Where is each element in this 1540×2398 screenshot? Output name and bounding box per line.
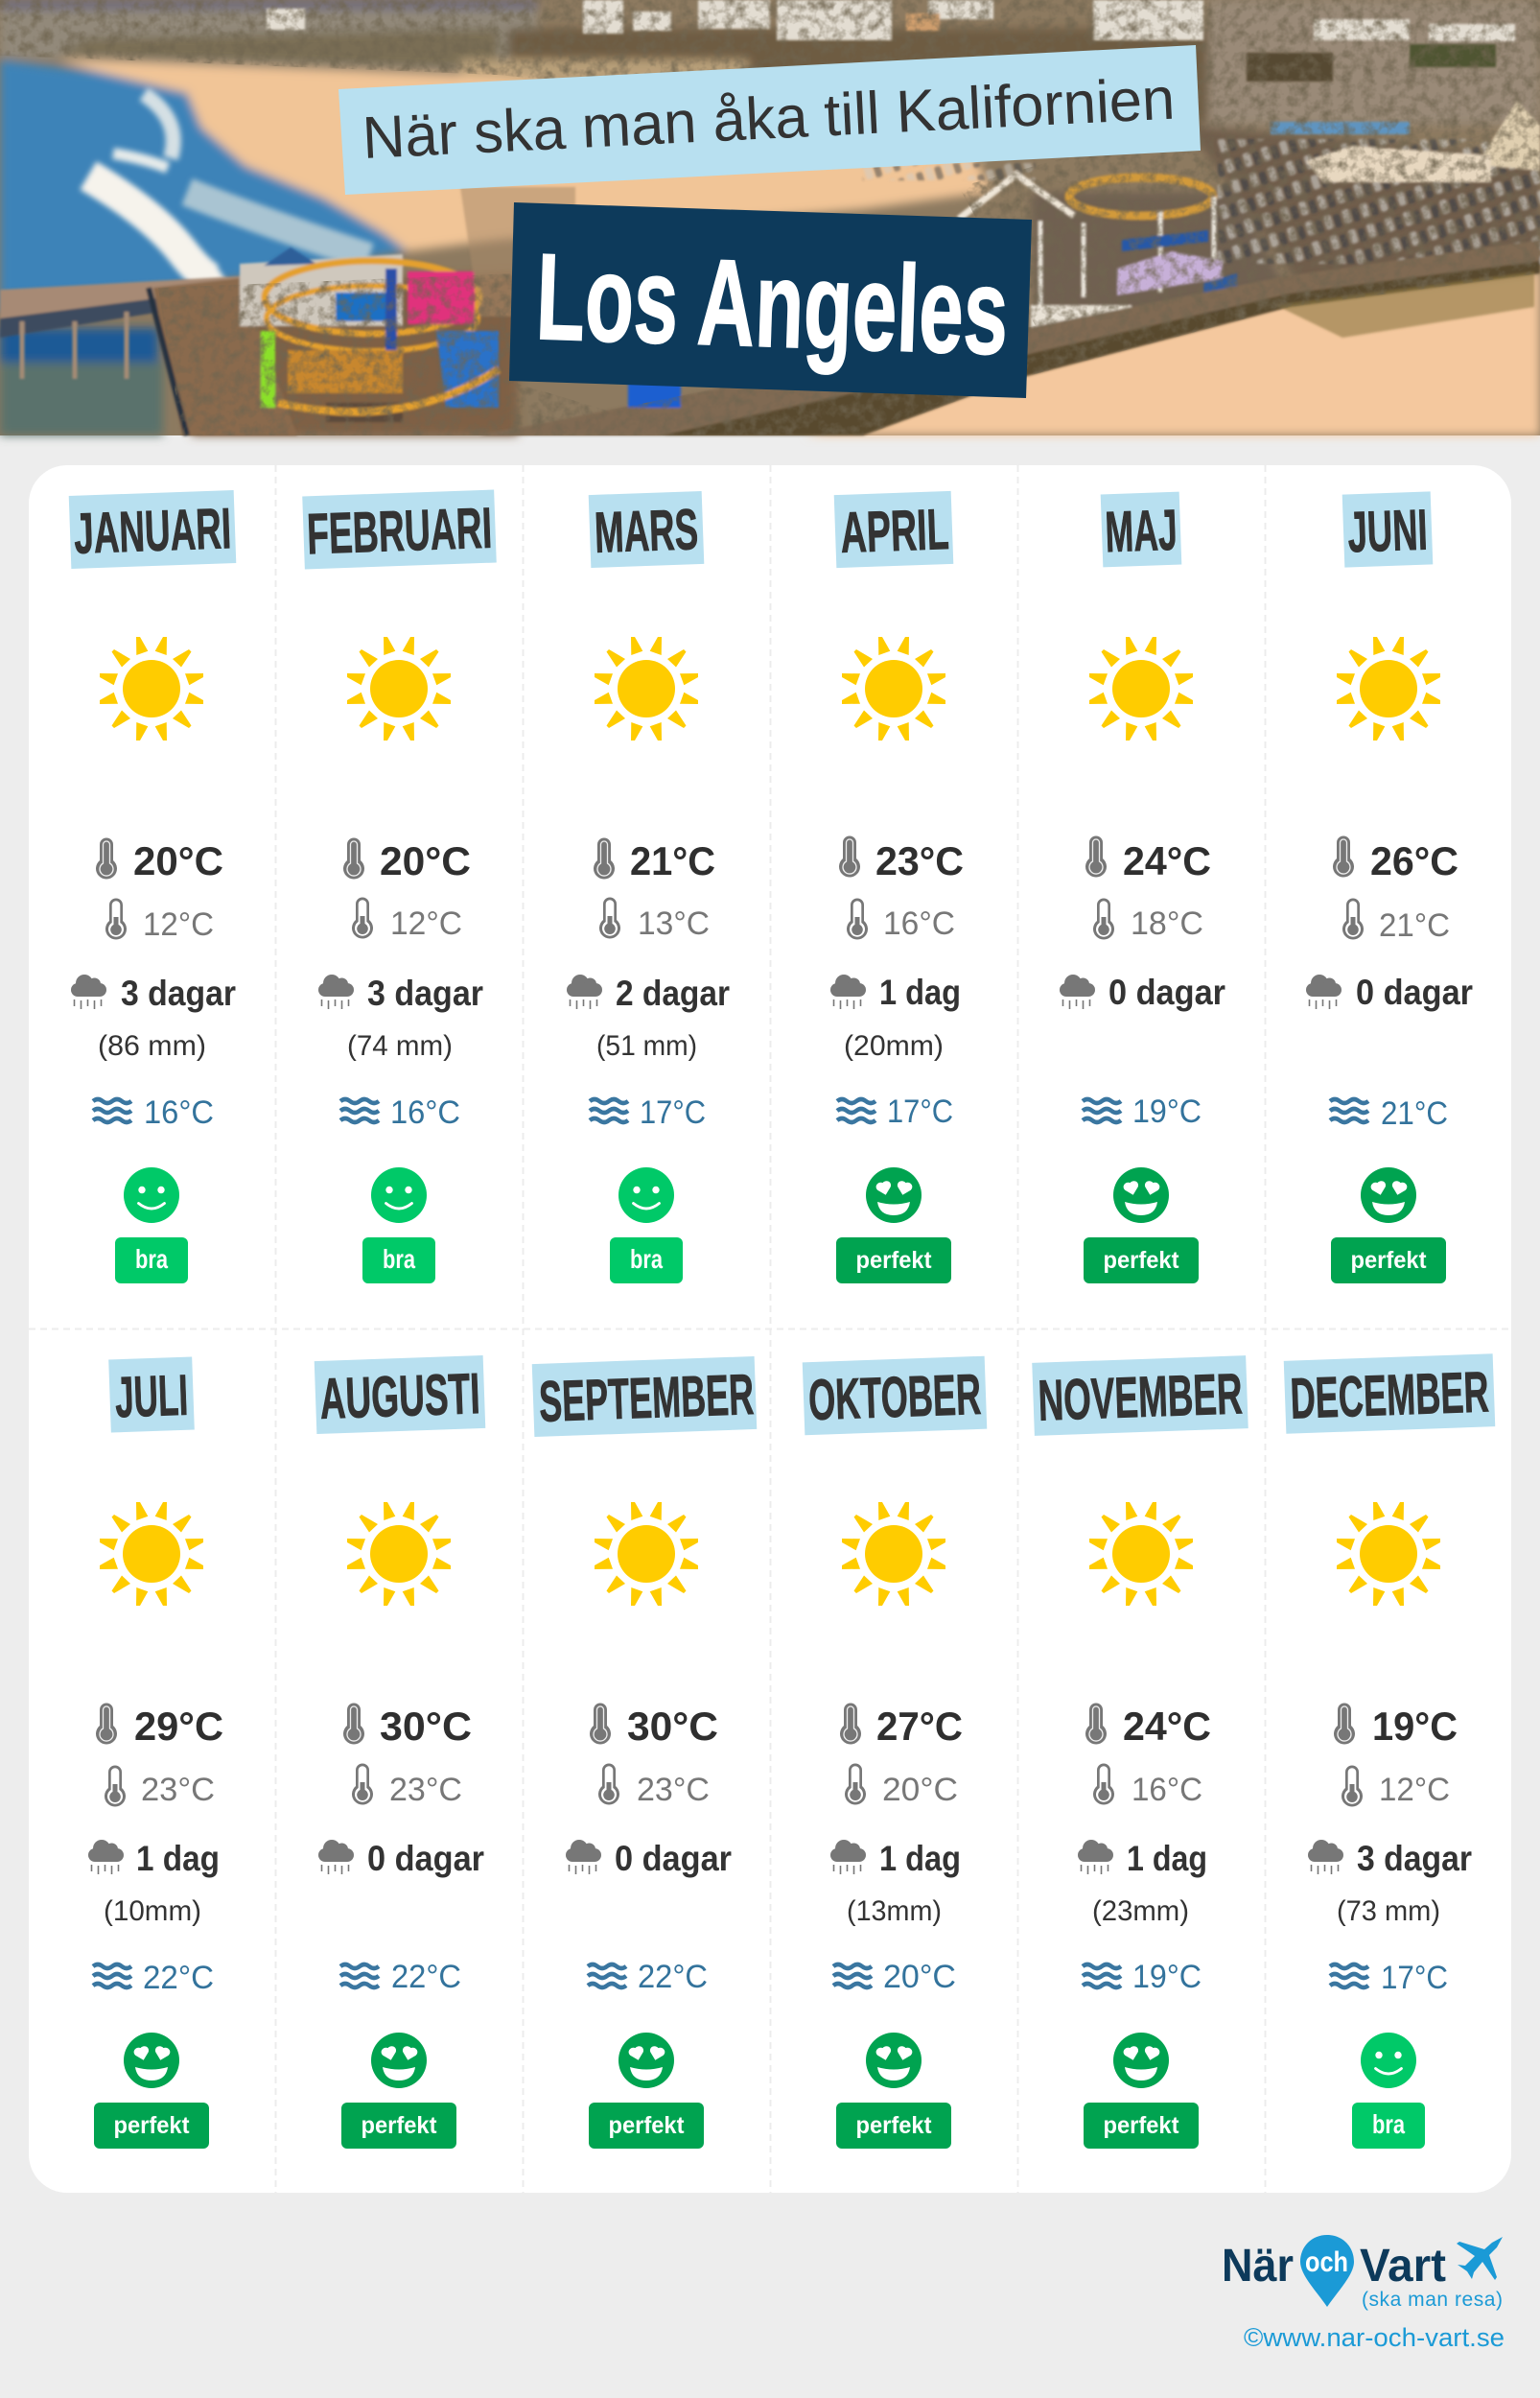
logo word: Vart: Vart xyxy=(1360,2241,1446,2292)
month heading: juli xyxy=(108,1357,195,1432)
icon: thermometer low xyxy=(105,1765,126,1806)
rating badge xyxy=(589,2103,704,2149)
rainfall: (13mm) xyxy=(847,1895,942,1927)
low temperature: 21°C xyxy=(1379,907,1450,944)
icon: water waves xyxy=(1083,1099,1121,1122)
low temperature: 23°C xyxy=(141,1772,215,1808)
low temperature: 12°C xyxy=(390,905,462,942)
rain days: 0 dagar xyxy=(1356,973,1473,1012)
icon: map pin: och xyxy=(1305,2246,1348,2278)
sea temperature: 16°C xyxy=(144,1094,214,1131)
icon: thermometer low xyxy=(599,898,620,938)
title banner xyxy=(509,202,1032,398)
icon: sun xyxy=(1089,637,1193,741)
month: juli xyxy=(88,1357,223,2149)
icon: sun xyxy=(842,1502,945,1606)
month: februari xyxy=(302,490,497,1283)
rating badge xyxy=(115,1237,188,1283)
sea temperature: 19°C xyxy=(1132,1959,1202,1995)
icon: water waves xyxy=(590,1099,628,1122)
icon: water waves xyxy=(1083,1964,1121,1987)
logo word: När: När xyxy=(1222,2241,1294,2292)
icon: thermometer low xyxy=(105,898,127,939)
rain days: 1 dag xyxy=(879,1839,961,1878)
icon: heart-eyes face xyxy=(371,2033,427,2088)
month: mars xyxy=(567,491,730,1283)
pier deck and underside xyxy=(479,240,1540,435)
icon: sun xyxy=(842,637,945,741)
low temperature: 16°C xyxy=(1132,1772,1202,1808)
icon: thermometer high xyxy=(343,1704,364,1744)
icon: water waves xyxy=(833,1964,872,1987)
icon: thermometer high xyxy=(594,838,615,879)
high temperature: 29°C xyxy=(134,1704,223,1749)
icon: rain cloud xyxy=(71,975,106,1009)
sea temperature: 16°C xyxy=(390,1094,460,1131)
sea temperature: 19°C xyxy=(1132,1093,1202,1130)
icon: water waves xyxy=(837,1099,875,1122)
icon: rain cloud xyxy=(830,1840,866,1874)
rating badge: bra xyxy=(630,1244,663,1274)
rainfall: (51 mm) xyxy=(596,1030,697,1062)
rating badge: perfekt xyxy=(1103,1247,1179,1274)
icon: thermometer high xyxy=(96,838,117,879)
icon: thermometer low xyxy=(845,1763,866,1804)
low temperature: 20°C xyxy=(882,1772,958,1808)
icon: smiley xyxy=(1361,2033,1416,2088)
rides on the right xyxy=(959,175,1074,219)
month heading: maj xyxy=(1101,492,1181,567)
month: september xyxy=(532,1356,757,2149)
high temperature: 21°C xyxy=(630,838,715,883)
month heading: augusti: AUGUSTI xyxy=(318,1361,481,1431)
month heading: september: SEPTEMBER xyxy=(538,1362,755,1434)
icon: water waves xyxy=(1330,1964,1368,1987)
rating badge: perfekt xyxy=(361,2112,437,2139)
rating badge: perfekt xyxy=(1350,1247,1427,1274)
month heading: maj: MAJ xyxy=(1104,498,1178,564)
icon: sun xyxy=(100,1502,203,1606)
icon: thermometer low xyxy=(1093,1763,1114,1804)
month: november xyxy=(1032,1355,1248,2149)
month: augusti xyxy=(315,1355,485,2149)
icon: smiley xyxy=(124,1167,179,1223)
month heading: november xyxy=(1032,1355,1248,1436)
rain days: 1 dag xyxy=(879,973,961,1012)
month: oktober xyxy=(803,1356,987,2149)
high temperature: 19°C xyxy=(1372,1704,1458,1749)
rating badge xyxy=(836,2103,951,2149)
icon: water waves xyxy=(340,1099,379,1122)
icon: thermometer low xyxy=(847,898,868,939)
rating badge xyxy=(362,1237,435,1283)
icon: heart-eyes face xyxy=(1361,1167,1416,1223)
rating badge: perfekt xyxy=(1103,2112,1179,2139)
website credit: ©www.nar-och-vart.se xyxy=(1244,2323,1505,2352)
month heading: juli: JULI xyxy=(114,1363,189,1429)
icon: water waves xyxy=(1330,1099,1368,1122)
rating badge xyxy=(341,2103,456,2149)
icon: thermometer high xyxy=(1334,1704,1355,1744)
hero photo: Santa Monica beach and pier xyxy=(0,0,1540,435)
high temperature: 24°C xyxy=(1123,838,1211,883)
icon: thermometer low xyxy=(598,1763,619,1804)
month: maj xyxy=(1060,492,1225,1283)
low temperature: 18°C xyxy=(1131,905,1203,942)
sea temperature: 17°C xyxy=(640,1094,706,1131)
rain days: 3 dagar xyxy=(1357,1839,1472,1878)
month heading: mars xyxy=(589,491,704,568)
rating badge xyxy=(610,1237,683,1283)
icon: thermometer high xyxy=(343,838,364,879)
icon: heart-eyes face xyxy=(866,1167,922,1223)
icon: heart-eyes face xyxy=(1113,2033,1169,2088)
icon: sun xyxy=(595,637,698,741)
rating badge: bra xyxy=(1372,2109,1405,2139)
rainfall: (74 mm) xyxy=(347,1030,453,1062)
low temperature: 23°C xyxy=(637,1772,710,1808)
icon: thermometer high xyxy=(840,1704,861,1744)
icon: heart-eyes face xyxy=(124,2033,179,2088)
month heading: september xyxy=(532,1356,757,1437)
logo tagline: (ska man resa) xyxy=(1362,2289,1503,2311)
rainfall: (73 mm) xyxy=(1337,1895,1440,1927)
high temperature: 23°C xyxy=(875,838,964,883)
month heading: juni: JUNI xyxy=(1346,498,1429,564)
icon: sun xyxy=(1337,637,1440,741)
rating badge xyxy=(1084,1237,1199,1283)
high temperature: 30°C xyxy=(380,1704,472,1749)
rain days: 3 dagar xyxy=(121,974,236,1013)
rating badge: perfekt xyxy=(608,2112,685,2139)
sea temperature: 21°C xyxy=(1381,1095,1448,1132)
icon: sun xyxy=(1337,1502,1440,1606)
icon: rain cloud xyxy=(88,1840,124,1874)
sea temperature: 20°C xyxy=(883,1959,956,1995)
rain days: 0 dagar xyxy=(367,1839,484,1878)
icon: thermometer high xyxy=(1333,836,1354,877)
high temperature: 26°C xyxy=(1370,838,1458,883)
month heading: april: APRIL xyxy=(839,497,950,565)
rain days: 0 dagar xyxy=(615,1839,732,1878)
rainfall: (10mm) xyxy=(104,1895,201,1927)
skyline buildings xyxy=(267,0,1515,41)
month heading: mars: MARS xyxy=(594,497,699,565)
high temperature: 20°C xyxy=(133,838,223,883)
month heading: oktober: OKTOBER xyxy=(807,1362,982,1432)
icon: thermometer high xyxy=(1085,1704,1107,1744)
month heading: januari: JANUARI xyxy=(73,496,232,566)
title banner: Los Angeles xyxy=(534,228,1011,381)
icon: rain cloud xyxy=(830,975,866,1009)
rain days: 1 dag xyxy=(1127,1839,1207,1878)
rating badge: perfekt xyxy=(855,2112,932,2139)
logo: När och Vart xyxy=(1222,2235,1503,2311)
low temperature: 12°C xyxy=(143,906,214,943)
subtitle banner xyxy=(338,45,1201,195)
icon: rain cloud xyxy=(1078,1840,1113,1874)
rating badge: perfekt xyxy=(855,1247,932,1274)
icon: thermometer low xyxy=(352,1763,373,1804)
month heading: augusti xyxy=(315,1355,485,1434)
rainfall: (23mm) xyxy=(1092,1895,1189,1927)
icon: airplane xyxy=(1457,2237,1503,2280)
rating badge xyxy=(1331,1237,1446,1283)
icon: heart-eyes face xyxy=(618,2033,674,2088)
high temperature: 30°C xyxy=(627,1704,718,1749)
icon: thermometer high xyxy=(839,836,860,877)
rating badge xyxy=(94,2103,209,2149)
rating badge xyxy=(1352,2103,1425,2149)
parking and buildings xyxy=(1218,139,1540,264)
icon: water waves xyxy=(588,1964,626,1987)
month heading: februari xyxy=(302,490,497,569)
icon: rain cloud xyxy=(318,975,354,1009)
low temperature: 13°C xyxy=(638,905,710,942)
sea temperature: 17°C xyxy=(887,1093,953,1130)
month: januari xyxy=(69,490,236,1283)
icon: water waves xyxy=(340,1964,379,1987)
icon: sun xyxy=(100,637,203,741)
sea temperature: 22°C xyxy=(638,1959,708,1995)
high temperature: 20°C xyxy=(380,838,471,883)
icon: thermometer high xyxy=(96,1704,117,1744)
rating badge: bra xyxy=(383,1244,415,1274)
month heading: oktober xyxy=(803,1356,987,1435)
icon: rain cloud xyxy=(567,975,602,1009)
icon: thermometer high xyxy=(1085,836,1107,877)
month heading: juni xyxy=(1342,491,1433,568)
weather panel xyxy=(29,465,1511,2193)
icon: thermometer low xyxy=(1093,898,1114,939)
icon: heart-eyes face xyxy=(866,2033,922,2088)
icon: sun xyxy=(347,1502,451,1606)
icon: thermometer high xyxy=(590,1704,611,1744)
sea temperature: 22°C xyxy=(143,1960,214,1996)
high temperature: 24°C xyxy=(1123,1704,1211,1749)
rainfall: (20mm) xyxy=(844,1030,944,1062)
icon: rain cloud xyxy=(1308,1840,1343,1874)
icon: rain cloud xyxy=(566,1840,601,1874)
sea temperature: 17°C xyxy=(1381,1960,1448,1996)
icon: smiley xyxy=(618,1167,674,1223)
rain days: 0 dagar xyxy=(1108,973,1225,1012)
amusement park xyxy=(240,254,403,326)
icon: map pin xyxy=(1300,2235,1354,2307)
icon: thermometer low xyxy=(1342,1765,1363,1806)
icon: thermometer low xyxy=(1342,898,1364,939)
icon: sun xyxy=(1089,1502,1193,1606)
rain days: 3 dagar xyxy=(367,974,483,1013)
rainfall: (86 mm) xyxy=(98,1030,206,1062)
high temperature: 27°C xyxy=(876,1704,963,1749)
icon: rain cloud xyxy=(318,1840,354,1874)
low temperature: 16°C xyxy=(883,905,955,942)
icon: sun xyxy=(347,637,451,741)
ocean surf xyxy=(88,176,225,282)
low temperature: 23°C xyxy=(389,1772,462,1808)
icon: sun xyxy=(595,1502,698,1606)
month: juni xyxy=(1306,491,1473,1283)
rating badge xyxy=(836,1237,951,1283)
photo texture xyxy=(0,0,1540,435)
month: december xyxy=(1284,1353,1495,2149)
rating badge: perfekt xyxy=(113,2112,190,2139)
month: april xyxy=(830,491,964,1283)
rating badge: bra xyxy=(135,1244,168,1274)
rain days: 1 dag xyxy=(136,1839,220,1878)
icon: water waves xyxy=(93,1964,131,1987)
month heading: januari xyxy=(69,490,236,569)
icon: rain cloud xyxy=(1306,975,1342,1009)
icon: rain cloud xyxy=(1060,975,1095,1009)
month heading: april xyxy=(834,491,953,568)
sea temperature: 22°C xyxy=(391,1959,461,1995)
icon: water waves xyxy=(93,1099,131,1122)
low temperature: 12°C xyxy=(1379,1772,1450,1808)
icon: thermometer low xyxy=(352,898,373,938)
month heading: februari: FEBRUARI xyxy=(306,496,493,566)
icon: heart-eyes face xyxy=(1113,1167,1169,1223)
rain days: 2 dagar xyxy=(616,974,730,1013)
rating badge xyxy=(1084,2103,1199,2149)
icon: smiley xyxy=(371,1167,427,1223)
month heading: november: NOVEMBER xyxy=(1037,1361,1244,1433)
subtitle banner: När ska man åka till Kalifornien xyxy=(361,66,1177,172)
